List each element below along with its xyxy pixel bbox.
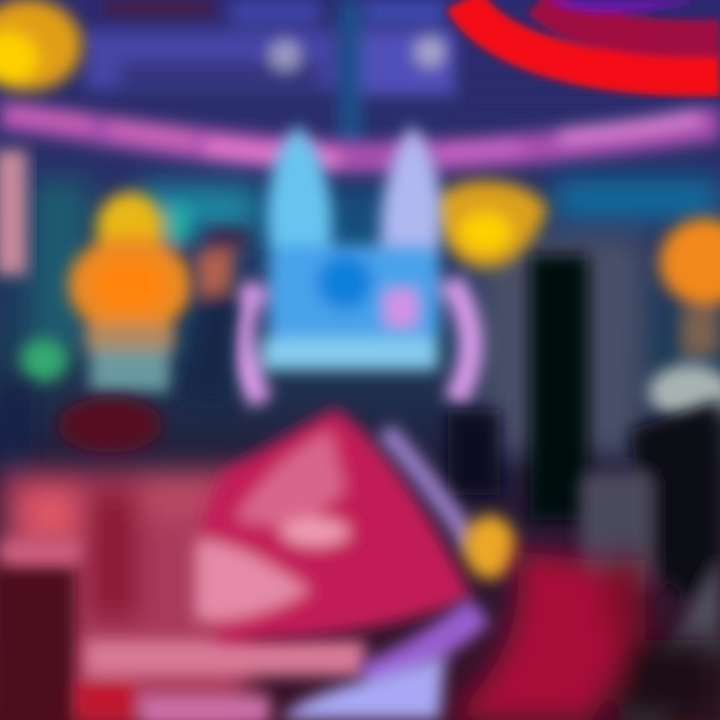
neon bunny sign — [242, 125, 471, 402]
crimson table — [195, 408, 472, 640]
lower-right red table — [450, 550, 720, 720]
right dark figure — [580, 400, 720, 720]
table edge glow — [365, 430, 480, 680]
bunny base bar — [262, 338, 438, 370]
bottom lavender glow — [280, 655, 445, 720]
top-left yellow lamp — [0, 0, 82, 91]
bunny side arcs — [242, 280, 471, 402]
ceiling grid — [85, 0, 720, 150]
pink floor streaks — [0, 540, 365, 720]
dark vertical panel — [448, 255, 588, 520]
left hanging lamp — [20, 192, 192, 392]
red neon arc — [464, 0, 720, 76]
pink ceiling band — [0, 100, 720, 174]
right orange lamp — [648, 218, 720, 420]
centre-right gold lamp — [430, 181, 548, 268]
lower-left dark block — [0, 565, 75, 720]
teal wall bands — [30, 180, 720, 455]
bunny ears — [267, 125, 442, 255]
left edge pink panel — [0, 150, 27, 275]
orange accent — [464, 515, 516, 579]
dark maroon blob — [0, 385, 162, 475]
bunny face — [268, 245, 440, 345]
lower-left pink and red crowd — [0, 470, 250, 720]
dark figure left of sign — [180, 228, 250, 405]
